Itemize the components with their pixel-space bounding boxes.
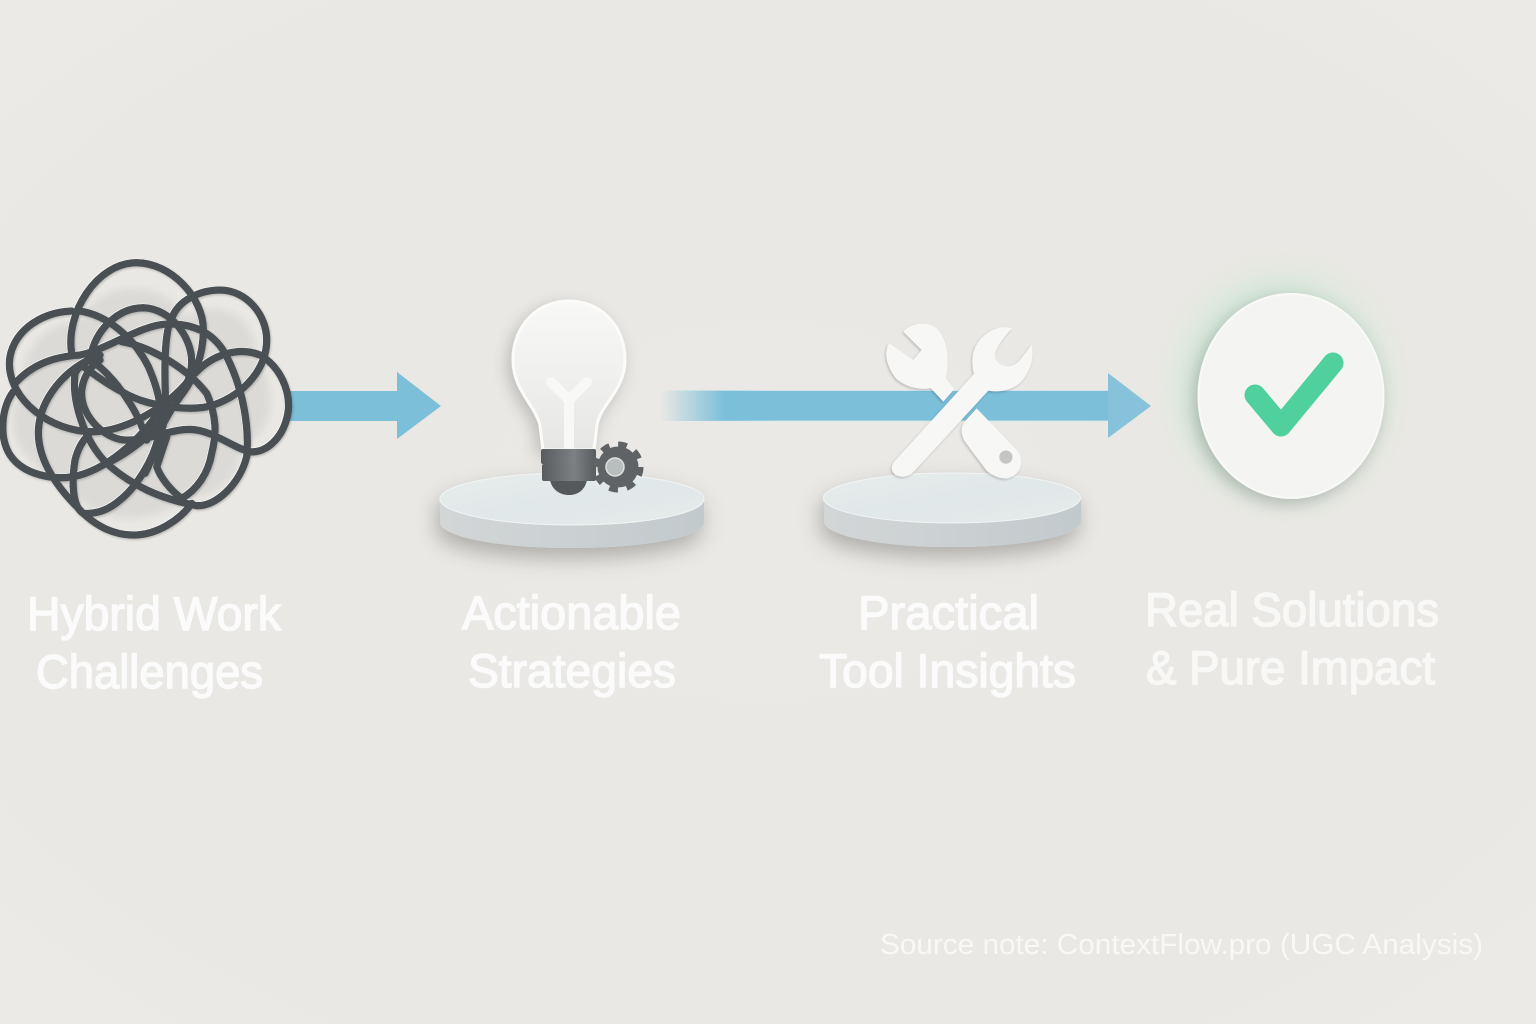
label: Real Solutions and Pure Impact: Real Solutions [1145, 583, 1439, 636]
label: Actionable Strategies: Strategies [468, 644, 676, 697]
left wrench head [886, 324, 954, 402]
arrow: challenges to strategies [288, 372, 441, 439]
bulb filament [551, 382, 587, 448]
label: Real Solutions and Pure Impact: & Pure Impact [1146, 641, 1435, 694]
source note: Source note: ContextFlow.pro (UGC Analysis) [880, 929, 1483, 961]
pedestal: tools [824, 473, 1081, 547]
check mark [1255, 363, 1333, 426]
icon: success check badge [1182, 280, 1384, 498]
label: Hybrid Work Challenges [27, 587, 281, 698]
green glow [1182, 280, 1382, 496]
bulb base [541, 449, 596, 495]
label: Actionable Strategies [462, 586, 681, 697]
icon: light bulb with gear [513, 301, 640, 495]
arrow: strategies through tools to solutions [660, 373, 1151, 438]
label: Practical Tool Insights: Practical [858, 586, 1039, 639]
label: Hybrid Work Challenges: Hybrid Work [27, 587, 281, 640]
label: Actionable Strategies: Actionable [462, 586, 681, 639]
label: Practical Tool Insights [819, 586, 1076, 697]
icon: tangled rope [3, 263, 289, 535]
label: Practical Tool Insights: Tool Insights [819, 644, 1076, 697]
pedestal: strategies [440, 473, 704, 548]
tangle shaded interior [12, 288, 270, 518]
label: Hybrid Work Challenges: Challenges [36, 645, 263, 698]
rope strands [3, 263, 289, 535]
badge disc [1198, 294, 1384, 498]
right wrench [892, 327, 1032, 477]
wrench hole [1000, 450, 1012, 464]
label: Real Solutions and Pure Impact [1145, 583, 1439, 694]
icon: crossed wrenches [886, 324, 1032, 478]
bulb glass [513, 301, 625, 450]
left wrench handle [962, 408, 1021, 478]
gear [596, 444, 640, 490]
